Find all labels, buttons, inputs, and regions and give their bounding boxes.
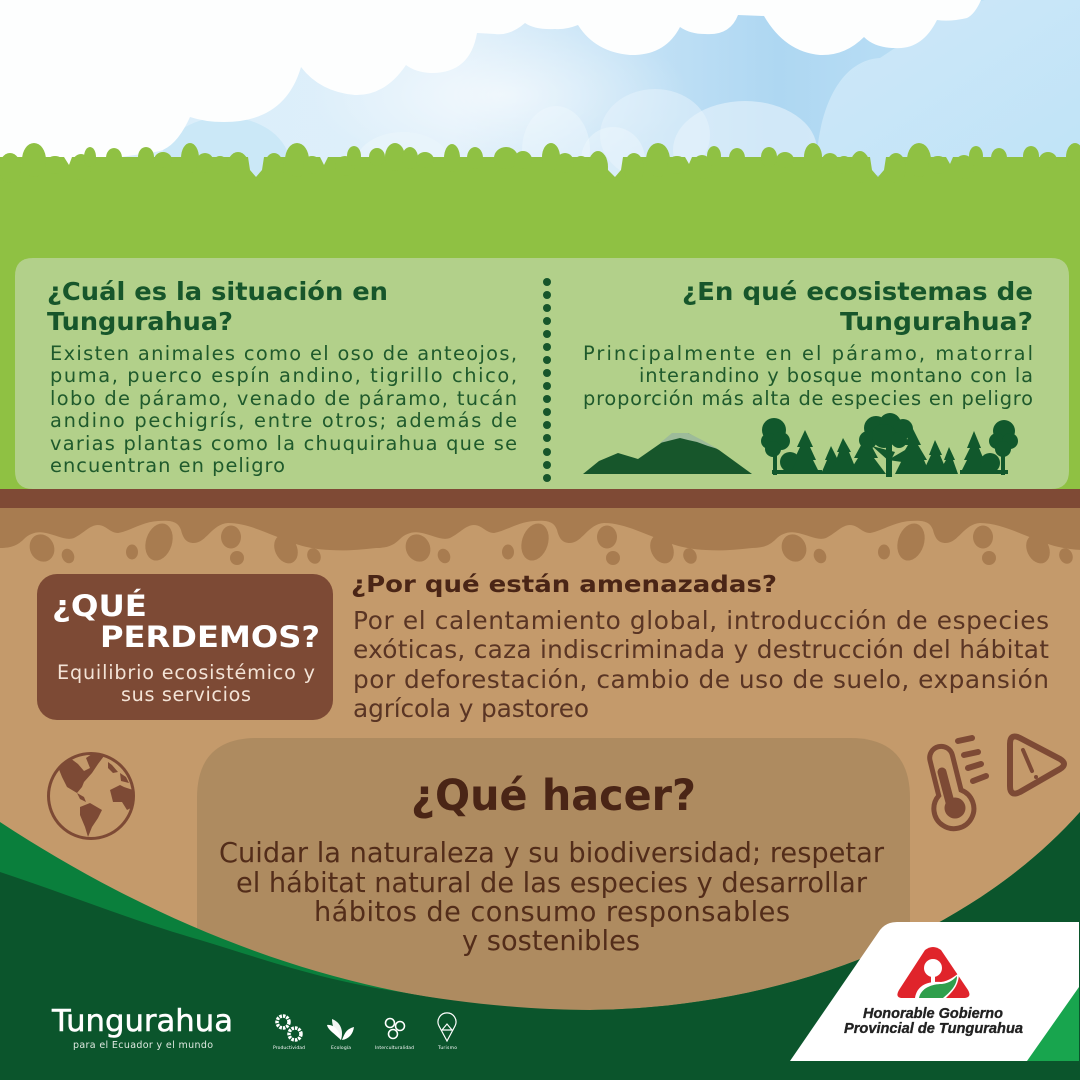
text: ecosystems body: interandino y bosque montano con la <box>639 364 1033 387</box>
icon: productivity gears <box>273 1016 305 1051</box>
green corner <box>1027 987 1079 1061</box>
sky background <box>0 0 1080 200</box>
icon: globe <box>48 754 134 838</box>
brown ground strip <box>0 489 1080 508</box>
icon: warning triangle <box>1010 736 1064 794</box>
logo text: Provincial de Tungurahua <box>844 1020 1023 1037</box>
text: situation body: encuentran en peligro <box>50 454 285 477</box>
heading: situation: Tungurahua? <box>47 307 233 336</box>
text: situation body: lobo de páramo, venado de páramo, tucán <box>50 387 517 410</box>
grass <box>0 143 1080 490</box>
icon: ecology leaves: Ecología <box>331 1044 351 1051</box>
text: ecosystem balance: Equilibrio ecosistémico y <box>57 661 315 684</box>
text: situation body: puma, puerco espín andino, tigrillo chico, <box>50 364 517 387</box>
white clouds <box>0 0 981 175</box>
heading: situation <box>47 277 388 336</box>
icon: forest <box>761 413 1018 477</box>
text: qué hacer body: hábitos de consumo responsables <box>314 897 790 928</box>
logo card: Honorable Gobierno Provincial <box>790 922 1079 1061</box>
logo: Tungurahua: para el Ecuador y el mundo <box>73 1040 213 1051</box>
panel: situation and ecosystems <box>15 258 1069 489</box>
text: qué hacer body: el hábitat natural de las especies y desarrollar <box>236 868 868 899</box>
heading: why threatened: ¿Por qué están amenazadas? <box>351 572 777 598</box>
text: qué hacer body <box>219 838 885 957</box>
icon: mountain <box>583 433 752 474</box>
panel: ¿Qué hacer? background <box>197 738 910 1030</box>
icon: tourism pin: Turismo <box>437 1045 457 1051</box>
heading: situation: ¿Cuál es la situación en <box>47 277 388 306</box>
text: situation body: varias plantas como la chuquirahua que se <box>50 432 517 455</box>
text: why threatened body: exóticas, caza indiscriminada y destrucción del hábitat <box>353 635 1049 664</box>
text: why threatened body <box>353 606 1049 723</box>
heading: ecosystems: Tungurahua? <box>840 307 1033 336</box>
heading: ecosystems <box>682 277 1033 336</box>
logo: Tungurahua: Tungurahua <box>51 1004 233 1039</box>
heading: qué perdemos <box>52 589 320 654</box>
text: why threatened body: Por el calentamiento global, introducción de especies <box>353 606 1049 635</box>
pale background clouds <box>160 0 1080 213</box>
heading: qué hacer: ¿Qué hacer? <box>411 771 696 821</box>
text: ecosystem balance: sus servicios <box>121 683 251 706</box>
icon: interculturality spiral <box>375 1018 414 1051</box>
soil background <box>0 489 1080 1080</box>
text: qué hacer body: Cuidar la naturaleza y su biodiversidad; respetar <box>219 838 885 869</box>
text: situation body <box>50 342 517 477</box>
text: ecosystem balance <box>57 661 315 706</box>
heading: ecosystems: ¿En qué ecosistemas de <box>682 277 1033 306</box>
heading: qué perdemos: PERDEMOS? <box>100 620 320 654</box>
bottom green band <box>0 812 1080 1080</box>
icon: provincial emblem <box>897 947 969 998</box>
text: situation body: Existen animales como el oso de anteojos, <box>50 342 517 365</box>
text: ecosystems body <box>583 342 1033 410</box>
text: why threatened body: agrícola y pastoreo <box>353 694 589 723</box>
icon: thermometer <box>919 738 986 833</box>
dotted divider <box>543 278 551 482</box>
logo text <box>844 1005 1023 1037</box>
icon: productivity gears: Productividad <box>273 1045 305 1051</box>
text: situation body: andino pechigrís, entre otros; además de <box>50 409 517 432</box>
text: qué hacer body: y sostenibles <box>462 926 640 957</box>
text: why threatened body: por deforestación, cambio de uso de suelo, expansión <box>353 665 1049 694</box>
logo text: Honorable Gobierno <box>863 1005 1003 1022</box>
icon: tourism pin <box>437 1013 457 1051</box>
heading: qué perdemos: ¿QUÉ <box>52 589 147 623</box>
panel: ¿Qué perdemos? <box>37 574 333 720</box>
icon: interculturality spiral: Interculturalidad <box>375 1045 414 1051</box>
text: ecosystems body: Principalmente en el páramo, matorral <box>583 342 1033 365</box>
icon: ecology leaves <box>327 1019 354 1051</box>
text: ecosystems body: proporción más alta de especies en peligro <box>583 387 1033 410</box>
